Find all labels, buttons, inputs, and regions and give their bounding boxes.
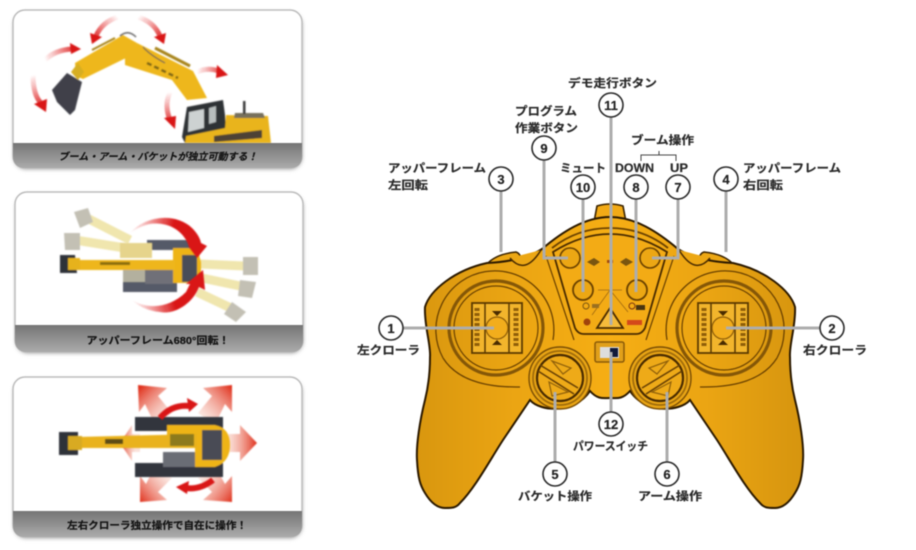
callout 6: arm operation: アーム操作 xyxy=(638,489,703,503)
caption bar: アッパーフレーム680°回転！ xyxy=(86,334,230,347)
top arc xyxy=(552,228,668,248)
callout 10: mute: ミュート xyxy=(560,163,606,175)
callout 5: bucket operation: バケット操作 xyxy=(518,489,593,503)
icon: direction arrows xyxy=(120,385,257,502)
callout 4: upper frame right turn: アッパーフレーム xyxy=(743,162,841,175)
callout 8: boom down: DOWN xyxy=(615,163,654,175)
caption bar xyxy=(15,325,303,352)
panel buttons xyxy=(560,248,580,268)
callout 4: upper frame right turn: 右回転 xyxy=(743,178,784,192)
callout 7: boom up: 7 xyxy=(674,180,682,195)
left thumb wheel xyxy=(529,347,591,409)
callout 9: program work button: 9 xyxy=(540,141,548,156)
icon: red turning arrows xyxy=(160,398,213,494)
top antenna hump xyxy=(594,204,626,222)
demo triangle button xyxy=(597,308,623,328)
caption bar: ブーム・アーム・バケットが独立可動する！ xyxy=(58,151,258,163)
callout 12: power switch: パワースイッチ xyxy=(573,440,648,453)
callout 5: bucket operation xyxy=(518,462,593,503)
callout 3: upper frame left turn: 3 xyxy=(497,172,505,187)
callout 5: bucket operation: 5 xyxy=(551,467,559,482)
callout 10: mute: 10 xyxy=(576,180,590,195)
callout 11: demo run button xyxy=(568,76,657,117)
callout 4: upper frame right turn xyxy=(714,162,841,192)
callout 8: boom down: 8 xyxy=(632,180,640,195)
controller outline xyxy=(417,217,803,508)
shoulder buttons xyxy=(487,252,520,272)
caption bar xyxy=(13,143,302,168)
boom operation heading with bracket xyxy=(631,133,695,161)
callout 10: mute xyxy=(560,163,606,199)
callout 12: power switch: 12 xyxy=(604,417,618,432)
callout 6: arm operation xyxy=(638,462,703,503)
callout 7: boom up: UP xyxy=(670,163,688,175)
callout 2: right crawler: 2 xyxy=(828,321,836,336)
left joystick xyxy=(436,271,554,387)
caption bar: 左右クローラ独立操作で自在に操作！ xyxy=(67,519,247,532)
callout 12: power switch xyxy=(573,412,648,453)
callout 4: upper frame right turn: 4 xyxy=(722,172,730,187)
panel icons xyxy=(587,258,633,266)
panel: independent crawler control xyxy=(13,377,302,538)
panel: upper frame 680 degree rotation xyxy=(15,192,303,353)
callout 2: right crawler: 右クローラ xyxy=(803,343,867,357)
callout 9: program work button xyxy=(515,104,578,160)
callout 9: program work button: プログラム xyxy=(515,104,577,118)
illustration: excavator top view with tracks xyxy=(59,417,230,477)
callout 2: right crawler xyxy=(803,316,867,357)
power switch xyxy=(595,342,624,362)
callout 1: left crawler xyxy=(357,316,420,357)
right joystick xyxy=(666,271,784,387)
illustration: excavator top view xyxy=(60,240,201,292)
callout 6: arm operation: 6 xyxy=(663,467,671,482)
panel: boom, arm and bucket movement xyxy=(13,10,302,169)
illustration: excavator side view xyxy=(52,33,271,143)
callout 3: upper frame left turn: 左回転 xyxy=(388,178,429,192)
callout 9: program work button: 作業ボタン xyxy=(515,121,578,135)
icon: red motion arrows xyxy=(33,17,228,129)
callout 3: upper frame left turn: アッパーフレーム xyxy=(388,162,486,175)
center panel xyxy=(553,234,667,334)
boom operation heading with bracket: ブーム操作 xyxy=(631,133,695,147)
shoulder crescents xyxy=(510,250,710,265)
icon: red rotation arrows xyxy=(130,218,207,312)
callout 3: upper frame left turn xyxy=(388,162,513,192)
callout 11: demo run button: 11 xyxy=(604,98,618,113)
callout leader lines xyxy=(403,117,820,462)
caption bar xyxy=(13,511,302,537)
callout 11: demo run button: デモ走行ボタン xyxy=(568,76,657,90)
callout 7: boom up xyxy=(666,163,690,199)
callout 1: left crawler: 左クローラ xyxy=(357,343,420,357)
callout 1: left crawler: 1 xyxy=(387,321,395,336)
controller body xyxy=(417,204,803,508)
right thumb wheel xyxy=(629,347,691,409)
callout 8: boom down xyxy=(615,163,654,199)
illustration: faded ghost arms xyxy=(64,208,258,322)
